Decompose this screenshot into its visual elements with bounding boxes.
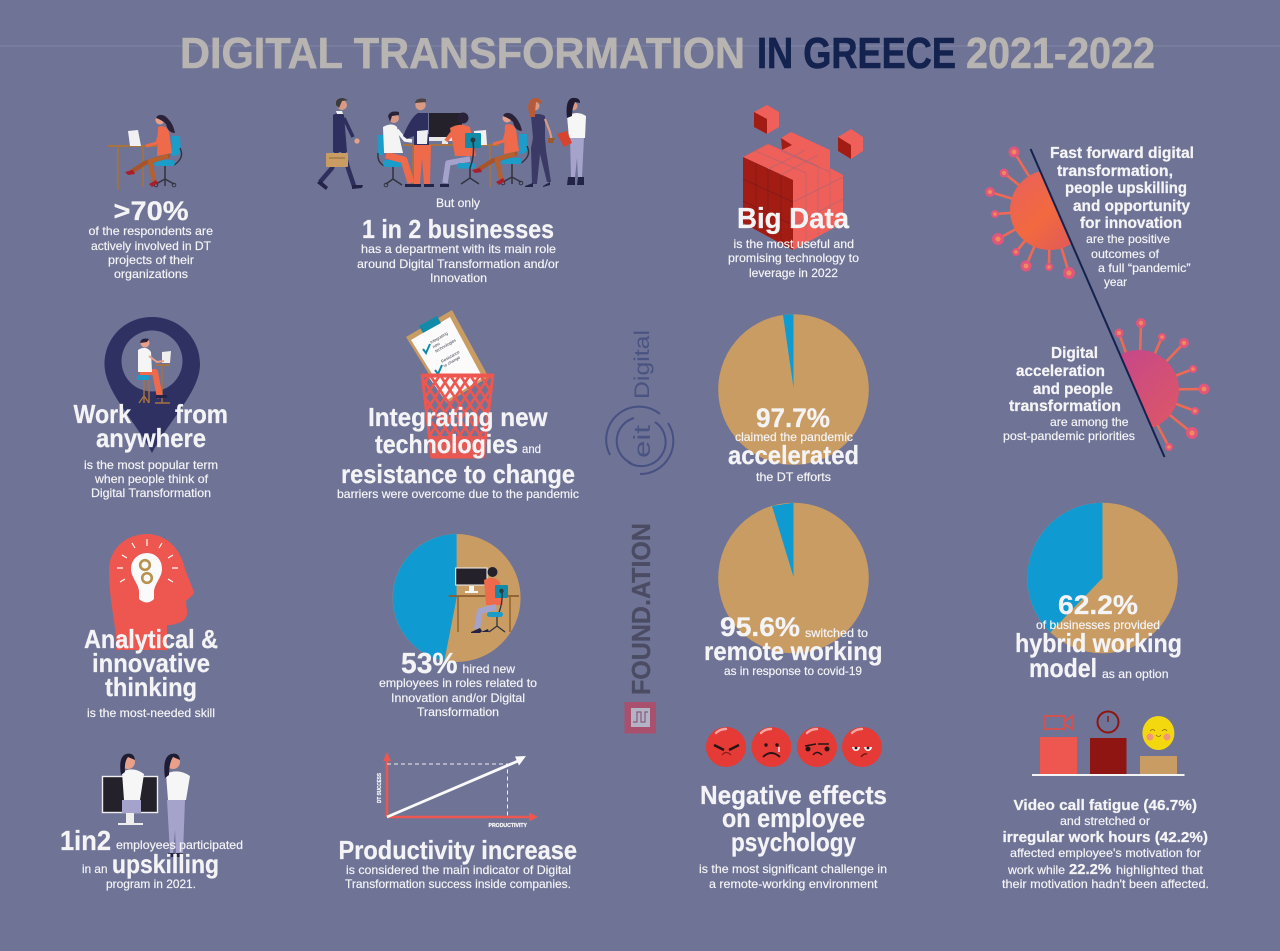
- text block: fatigue statistics: highlighted that: [1116, 863, 1204, 877]
- line chart: productivity vs DT success: PRODUCTIVITY: [488, 823, 528, 829]
- small text: but only: But only: [436, 196, 480, 210]
- title: IN GREECE: [757, 29, 956, 78]
- text: program in 2021: program in 2021.: [106, 877, 196, 891]
- icon: angry faces: [706, 727, 882, 767]
- heading: negative effects: on employee: [722, 803, 865, 833]
- panel: over 70 percent involved: [88, 115, 213, 281]
- logo: Foundation: FOUND.ATION: [626, 523, 656, 695]
- standing woman in navy: [525, 98, 555, 187]
- text block: is the most significant challenge in: [699, 862, 887, 876]
- icon: clipboard in basket: new: [432, 341, 441, 349]
- text: response to covid: as in response to covid-19: [724, 664, 862, 678]
- text block: around Digital Transformation and/or: [357, 257, 559, 271]
- heading: post-pandemic priorities: transformation: [1009, 398, 1121, 415]
- heading: positive outcomes: for innovation: [1080, 215, 1182, 232]
- text block: promising technology to: [728, 251, 859, 265]
- text block: fatigue statistics: their motivation hadn't been affected.: [1002, 877, 1209, 891]
- logo: EIT Digital: eit: [629, 424, 655, 458]
- heading: positive outcomes: transformation,: [1057, 163, 1173, 180]
- standing man: [403, 98, 434, 187]
- heading: analytical and innovative thinking: Analytical &: [84, 624, 218, 654]
- panel: barriers overcome: [337, 310, 579, 501]
- icon: clock: [1098, 712, 1118, 732]
- heading: positive outcomes: and opportunity: [1073, 198, 1190, 215]
- panel: pandemic outcomes viruses: [985, 145, 1210, 457]
- icon: man at computer: [449, 567, 519, 633]
- text block: positive outcomes: outcomes of: [1091, 247, 1160, 261]
- text: of businesses provided: of businesses provided: [1036, 618, 1160, 632]
- face: annoyed: [842, 727, 882, 767]
- bar chart: [1032, 712, 1184, 775]
- logo: EIT Digital: Digital: [631, 330, 654, 399]
- text block: fatigue statistics: [1002, 797, 1209, 891]
- text block: Transformation success inside companies.: [345, 877, 571, 891]
- pie chart: [1027, 503, 1178, 653]
- heading: 53 percent: 53%: [401, 648, 458, 680]
- text block: Innovation: [430, 271, 487, 285]
- line chart: productivity vs DT success: DT SUCCESS: [377, 772, 383, 803]
- panel: work from anywhere: [74, 317, 228, 500]
- icon: clipboard in basket: Resistance: [440, 349, 461, 364]
- text block: is the most-needed skill: [87, 706, 215, 720]
- text block: Transformation: [417, 705, 499, 719]
- desk and monitor: [403, 113, 499, 187]
- heading: positive outcomes: Fast forward digital: [1050, 145, 1194, 162]
- heading: post-pandemic priorities: Digital: [1051, 345, 1098, 362]
- heading: integrating new technologies: and: [522, 442, 541, 456]
- text block: Digital Transformation: [91, 486, 211, 500]
- text block: Innovation and/or Digital: [391, 691, 525, 705]
- text: as an option: as an option: [1102, 667, 1168, 681]
- heading: negative effects: [700, 780, 887, 857]
- text block: is considered the main indicator of Digital: [346, 863, 571, 877]
- line chart: productivity vs DT success: [377, 752, 538, 829]
- seated man: [378, 112, 414, 187]
- text block: [357, 242, 559, 285]
- icon: clipboard in basket: to change: [442, 354, 462, 368]
- text block: employees in roles related to: [379, 676, 537, 690]
- heading: work from anywhere: [74, 399, 228, 453]
- panel: 53 percent hired: [379, 534, 537, 719]
- logo: EIT Digital: [606, 330, 673, 474]
- heading: big data: Big Data: [737, 203, 850, 235]
- text block: post-pandemic priorities: post-pandemic priorities: [1003, 429, 1135, 443]
- panel: 1 in 2 businesses: [317, 98, 586, 285]
- text block: has a department with its main role: [361, 242, 556, 256]
- heading: upskilling: upskilling: [112, 849, 219, 879]
- face: angry: [706, 727, 746, 767]
- text: claimed the pandemic: claimed the pandemic: [735, 430, 853, 444]
- icon: happy emoji: [1142, 716, 1174, 750]
- heading: negative effects: Negative effects: [700, 780, 887, 810]
- heading: negative effects: psychology: [731, 827, 856, 857]
- text block: leverage in 2022: [749, 266, 838, 280]
- pie: 62.2 percent: [1015, 503, 1182, 683]
- text block: fatigue statistics: irregular work hours (42.2%): [1002, 829, 1208, 846]
- text block: fatigue statistics: Video call fatigue (46.7%): [1014, 797, 1197, 814]
- clipboard seen through basket: [428, 376, 486, 403]
- heading: analytical and innovative thinking: [84, 624, 218, 702]
- heading: over 70 percent: >70%: [114, 196, 188, 226]
- text block: is the most popular term: [84, 458, 218, 472]
- icon: pink virus: [1114, 318, 1210, 451]
- heading: 97.7 percent: 97.7%: [756, 403, 830, 433]
- heading: post-pandemic priorities: acceleration: [1016, 363, 1105, 380]
- heading: hybrid working model: model: [1029, 653, 1097, 683]
- heading: 1 in 2: 1in2: [60, 825, 111, 856]
- text block: fatigue statistics: affected employee's motivation for: [1010, 846, 1201, 860]
- panel: video call fatigue: [1002, 712, 1209, 891]
- heading: accelerated: accelerated: [728, 440, 859, 470]
- heading: integrating new technologies: [341, 402, 575, 489]
- text block: positive outcomes: a full “pandemic”: [1098, 261, 1190, 275]
- heading: integrating new technologies: technologies: [375, 429, 518, 459]
- icon: clipboard in basket: [406, 310, 493, 458]
- seated woman right: [472, 113, 529, 185]
- heading: analytical and innovative thinking: innovative: [92, 648, 210, 678]
- text block: [699, 862, 887, 891]
- icon: office team: [317, 98, 586, 190]
- heading: positive outcomes: [1050, 145, 1194, 232]
- pie chart: [393, 534, 521, 662]
- text block: projects of their: [108, 253, 194, 267]
- text block: positive outcomes: year: [1104, 275, 1127, 289]
- heading: hybrid working model: [1015, 628, 1182, 683]
- text block: positive outcomes: [1086, 232, 1190, 289]
- pie chart: [718, 503, 869, 653]
- panel: upskilling: [60, 754, 243, 891]
- heading: productivity increase: Productivity increase: [338, 835, 577, 865]
- heading: analytical and innovative thinking: thinking: [105, 672, 197, 702]
- heading: work from anywhere: anywhere: [96, 423, 206, 453]
- heading: integrating new technologies: Integrating new: [368, 402, 548, 432]
- heading: post-pandemic priorities: [1009, 345, 1121, 415]
- text block: [84, 458, 218, 500]
- icon: orange virus: [985, 146, 1075, 279]
- pie: 97.7 percent: [718, 314, 869, 484]
- heading: 95.6 percent: 95.6%: [720, 612, 800, 642]
- heading: work from anywhere: Work: [74, 399, 131, 429]
- icon: clipboard in basket: Integrating: [429, 330, 449, 345]
- text block: [379, 662, 537, 719]
- text: the DT efforts: the DT efforts: [756, 470, 831, 484]
- woman with folder: [557, 98, 586, 185]
- heading: positive outcomes: people upskilling: [1065, 180, 1187, 197]
- panel: productivity increase: [338, 752, 577, 891]
- panel: negative effects: [699, 727, 887, 891]
- pie chart: [718, 314, 869, 465]
- face: sad: [752, 727, 792, 767]
- text block: hired new: [462, 662, 515, 676]
- title: [180, 29, 1155, 78]
- icon: red data cubes: [743, 105, 863, 250]
- heading: remote working: remote working: [704, 636, 882, 666]
- text: in an: in an: [82, 862, 108, 876]
- text block: fatigue statistics: and stretched or: [1060, 814, 1150, 828]
- title: 2021-2022: [966, 29, 1155, 78]
- panel: big data: [728, 105, 863, 280]
- heading: post-pandemic priorities: and people: [1033, 381, 1113, 398]
- text block: [728, 237, 859, 280]
- face: furious: [797, 727, 837, 767]
- icon: clipboard in basket: technologies: [434, 337, 457, 354]
- heading: work from anywhere: from: [175, 399, 228, 429]
- text: switched to: switched to: [805, 626, 868, 640]
- icon: location pin with man: [104, 317, 200, 453]
- pie: 95.6 percent: [704, 503, 882, 678]
- title: DIGITAL TRANSFORMATION: [180, 29, 745, 78]
- icon: woman at laptop: [108, 115, 182, 190]
- icon: women and monitor: [102, 754, 190, 857]
- text block: fatigue statistics: 22.2%: [1069, 861, 1111, 878]
- icon: head with lightbulb: [109, 534, 194, 650]
- heading: hybrid working model: hybrid working: [1015, 628, 1182, 658]
- text: employees participated: employees participated: [116, 838, 243, 852]
- icon: video camera: [1045, 716, 1072, 729]
- diagonal divider line: [1031, 149, 1164, 457]
- text block: when people think of: [94, 472, 209, 486]
- panel: analytical thinking: [84, 534, 218, 720]
- text block: organizations: [114, 267, 188, 281]
- heading: 1 in 2 businesses: 1 in 2 businesses: [362, 214, 554, 244]
- text block: fatigue statistics: work while: [1007, 863, 1065, 877]
- text block: barriers were overcome due to the pandemic: [337, 487, 579, 501]
- person from behind: [440, 112, 481, 187]
- heading: 62.2 percent: 62.2%: [1058, 590, 1138, 620]
- heading: integrating new technologies: resistance to change: [341, 459, 575, 489]
- text block: post-pandemic priorities: [1003, 415, 1135, 443]
- text block: positive outcomes: are the positive: [1086, 232, 1170, 246]
- text block: actively involved in DT: [91, 239, 212, 253]
- text block: is the most useful and: [734, 237, 854, 251]
- text block: post-pandemic priorities: are among the: [1050, 415, 1129, 429]
- text block: [88, 224, 213, 281]
- text block: a remote-working environment: [709, 877, 878, 891]
- text block: of the respondents are: [88, 224, 213, 238]
- text block: [345, 863, 571, 891]
- walking man: [317, 98, 363, 190]
